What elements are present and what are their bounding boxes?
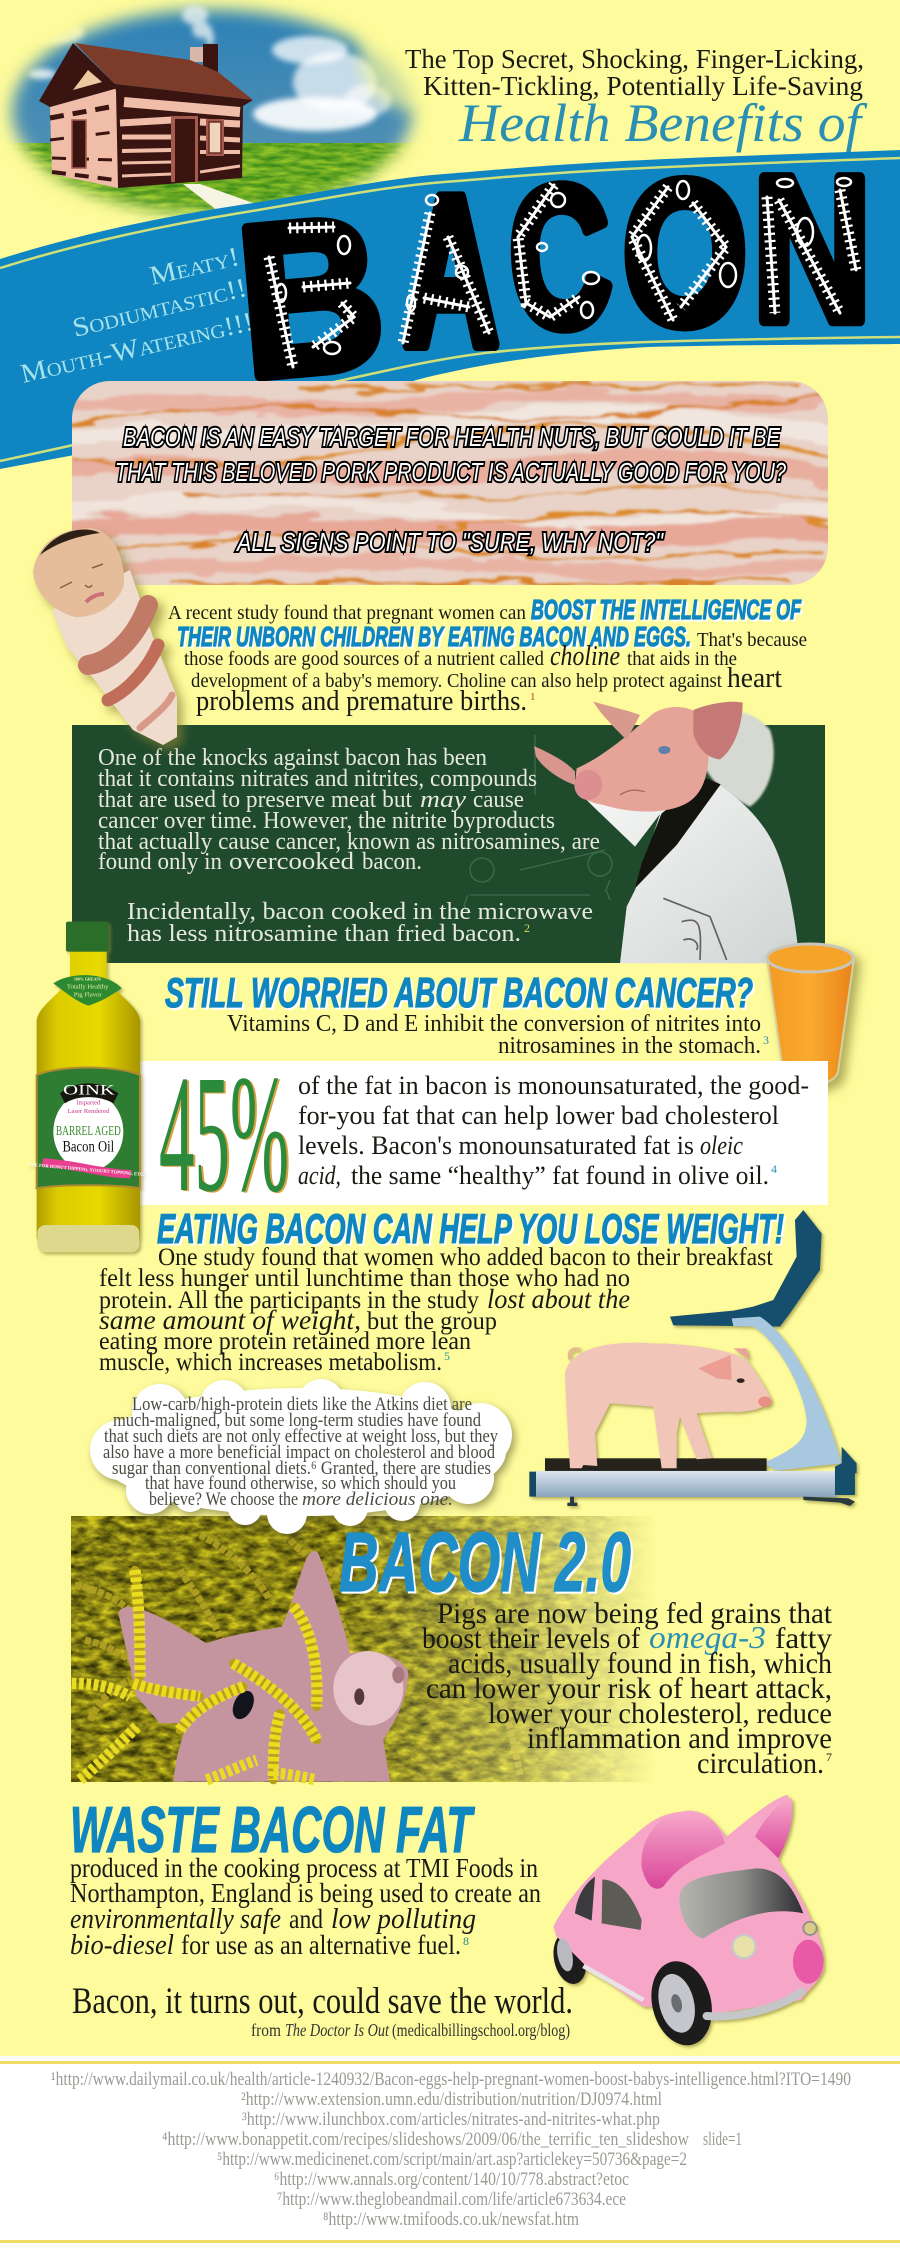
panel: 45 percent xyxy=(140,1041,828,1227)
cabin door xyxy=(171,116,198,182)
text block: bio-diesel xyxy=(70,1853,541,1961)
footnote list: ⁵http://www.medicinenet.com/script/main/art.asp?articlekey=50736&page=2 xyxy=(217,2149,687,2170)
coat pocket and glasses xyxy=(663,898,727,960)
neck label: 100% GREASY xyxy=(74,976,102,981)
banner taglines: Sodiumtastic!! xyxy=(69,272,249,343)
heading: waste bacon fat: WASTE BACON FAT xyxy=(70,1793,475,1866)
credit line: The Doctor Is Out xyxy=(285,2020,390,2040)
sky and grass vignette xyxy=(0,0,424,221)
pig ear xyxy=(698,1355,732,1380)
pig eye xyxy=(737,1378,745,1383)
chalkboard copy: may xyxy=(420,787,466,813)
text block: bio-diesel: and xyxy=(289,1904,323,1934)
text block: weight study: felt less hunger until lunchtime than those who had no xyxy=(99,1265,630,1292)
banner taglines xyxy=(18,241,256,389)
running board xyxy=(583,1966,643,2000)
panel: 45 percent: 45% xyxy=(159,1041,289,1227)
banner taglines: Mouth-Watering!!! xyxy=(18,306,256,389)
text block: weight study: lost about the xyxy=(487,1284,630,1314)
text block: vitamins xyxy=(227,1011,769,1059)
credit line: (medicalbillingschool.org/blog) xyxy=(392,2020,570,2041)
nostrils xyxy=(354,1688,364,1705)
stat copy: oleic xyxy=(700,1131,743,1160)
chalkboard copy: that are used to preserve meat but xyxy=(98,787,412,813)
log highlights xyxy=(120,102,240,176)
pig head xyxy=(575,707,709,811)
heading: health benefits of: Health Benefits of xyxy=(458,93,868,153)
text block: intelligence study: choline xyxy=(550,641,620,672)
text block: intelligence study: That's because xyxy=(697,629,807,651)
hand with chalk xyxy=(534,746,575,785)
text block: intelligence study: 1 xyxy=(530,691,536,703)
text block: omega-3 xyxy=(422,1597,833,1780)
OINK arc xyxy=(60,1083,118,1103)
chalkboard copy: has less nitrosamine than fried bacon. xyxy=(127,921,521,947)
headlight xyxy=(732,1935,756,1958)
stat copy: the same “healthy” fat found in olive oil. xyxy=(351,1161,769,1190)
deck rail xyxy=(535,1471,837,1497)
brand name: OINK xyxy=(63,1082,115,1098)
illustration: baby wrapped in bacon xyxy=(33,528,177,745)
stat copy: levels. Bacon's monounsaturated fat is xyxy=(298,1131,694,1160)
text block: omega-3: boost their levels of xyxy=(422,1622,640,1655)
neck label: Pig Flavor xyxy=(74,991,102,998)
text block: weight study: One study found that women who added bacon to their breakfast xyxy=(158,1244,773,1271)
white garden path xyxy=(183,184,256,211)
wild white hair xyxy=(703,712,774,807)
cabin window xyxy=(206,119,224,156)
treadmill upright xyxy=(732,1317,842,1471)
white panel xyxy=(140,1061,828,1205)
text block: omega-3: 7 xyxy=(826,1750,832,1764)
text block: intelligence study xyxy=(168,594,807,717)
credit line xyxy=(251,2020,570,2041)
neck label xyxy=(53,975,122,1006)
text block: omega-3: lower your cholesterol, reduce xyxy=(488,1697,832,1730)
gable xyxy=(39,43,118,107)
left wall xyxy=(50,88,118,188)
gable light patch xyxy=(73,70,102,90)
cloud copy: that have found otherwise, so which should you xyxy=(145,1473,456,1494)
label text: Laser Rendered xyxy=(67,1108,110,1115)
main label xyxy=(37,1067,140,1188)
chimney smoke xyxy=(182,5,214,46)
label text: Bacon Oil xyxy=(62,1139,115,1156)
chalkboard copy xyxy=(98,745,600,947)
intro copy xyxy=(115,422,786,557)
letter B: B xyxy=(230,172,392,422)
cloud shape xyxy=(90,1379,512,1534)
roof xyxy=(75,43,253,100)
far ear xyxy=(755,1798,793,1858)
pig snout xyxy=(333,1651,403,1726)
footnote list: ⁷http://www.theglobeandmail.com/life/article673634.ece xyxy=(277,2189,626,2210)
closing line: Bacon, it turns out, could save the world. xyxy=(72,1981,573,2022)
pale oil at base xyxy=(37,1225,139,1252)
car body xyxy=(553,1795,824,2015)
intro copy: ALL SIGNS POINT TO "SURE, WHY NOT?" xyxy=(235,527,664,557)
illustration: pig car xyxy=(549,1795,824,2052)
bacon texture xyxy=(50,381,860,585)
pig body xyxy=(565,1343,772,1468)
baby face xyxy=(60,564,104,602)
text block: bio-diesel: environmentally safe xyxy=(70,1904,281,1935)
footer background xyxy=(0,2056,900,2256)
text block: bio-diesel: Northampton, England is being used to create an xyxy=(70,1878,541,1908)
pig tail xyxy=(569,1349,580,1359)
panel: bacon strip intro xyxy=(50,381,860,585)
neck label: Totally Healthy xyxy=(67,983,109,990)
treadmill console xyxy=(670,1210,822,1327)
heading: top secret subtitle: The Top Secret, Shocking, Finger-Licking, xyxy=(405,44,864,74)
bacon wrap xyxy=(52,570,177,745)
title: BACON letters xyxy=(230,134,871,422)
cloud copy: that such diets are not only effective at weight loss, but they xyxy=(104,1426,498,1447)
text block: bio-diesel: bio-diesel xyxy=(70,1930,174,1961)
wheat ears background xyxy=(75,1535,610,1775)
panel: bacon 2.0 wheat field xyxy=(71,1516,661,1782)
snout xyxy=(574,770,602,800)
car snout xyxy=(793,1940,824,1984)
chalkboard copy: bacon. xyxy=(362,849,422,875)
text block: intelligence study: that aids in the xyxy=(627,648,737,670)
chimney xyxy=(190,47,203,62)
text block: omega-3: acids, usually found in fish, which xyxy=(448,1647,832,1680)
chimney stack xyxy=(203,44,218,74)
wheat stalk highlights xyxy=(72,1570,317,1780)
pig left ear xyxy=(593,702,640,740)
windshield xyxy=(679,1868,803,1938)
side window xyxy=(575,1877,595,1921)
far nostril xyxy=(392,1667,404,1683)
chalkboard copy: overcooked xyxy=(229,849,354,875)
bottle body xyxy=(37,952,140,1252)
white oval xyxy=(53,1092,123,1171)
near ear xyxy=(642,1811,725,1889)
text block: intelligence study: A recent study found that pregnant women can xyxy=(168,602,526,624)
panel: nitrates chalkboard xyxy=(72,702,825,963)
wheat photo xyxy=(71,1516,661,1782)
chrome bumper xyxy=(707,1992,802,2016)
pig snout xyxy=(758,1396,772,1407)
chalkboard copy: One of the knocks against bacon has been xyxy=(98,745,487,771)
pink ribbon: USE FOR DONUT DIPPING, YOGURT TOPPING, ETC. xyxy=(29,1163,145,1178)
text block: intelligence study: problems and premature births. xyxy=(196,686,527,717)
chalkboard xyxy=(72,725,825,963)
footnote list: ²http://www.extension.umn.edu/distribution/nutrition/DJ0974.html xyxy=(241,2089,662,2110)
text block: omega-3: circulation. xyxy=(697,1747,824,1780)
chalkboard copy: cancer over time. However, the nitrite byproducts xyxy=(98,808,555,834)
left wall dark patches xyxy=(50,106,115,180)
bacon streaks xyxy=(88,605,172,728)
cloud copy: Low-carb/high-protein diets like the Atkins diet are xyxy=(132,1394,472,1415)
letter C: C xyxy=(504,143,616,371)
cloud copy: believe? We choose the xyxy=(149,1489,298,1510)
door opening xyxy=(175,119,195,182)
pig eye xyxy=(229,1687,258,1723)
far headlight xyxy=(803,1922,817,1935)
footnote list: ⁴http://www.bonappetit.com/recipes/slideshows/2009/06/the_terrific_ten_slideshow xyxy=(162,2129,689,2150)
text block: vitamins: Vitamins C, D and E inhibit the conversion of nitrites into xyxy=(227,1011,761,1037)
illustration: pig on treadmill xyxy=(529,1210,857,1506)
side window xyxy=(72,120,86,168)
footer top rule xyxy=(0,2061,900,2064)
door window xyxy=(602,1879,642,1930)
pig head xyxy=(118,1551,408,1782)
wheat stalks base xyxy=(133,1570,317,1780)
footnote list: ³http://www.ilunchbox.com/articles/nitrates-and-nitrites-what.php xyxy=(242,2109,660,2130)
belt xyxy=(545,1458,767,1471)
text block: bacon 2.0 heading: BACON 2.0 xyxy=(339,1515,631,1609)
text block: weight study: eating more protein retained more lean xyxy=(99,1328,471,1355)
bottle cap xyxy=(66,922,109,952)
pig mouth xyxy=(620,790,645,795)
stat copy: of the fat in bacon is monounsaturated, the good- xyxy=(298,1071,809,1100)
text block: weight study: protein. All the participants in the study xyxy=(99,1287,479,1314)
feet xyxy=(567,1497,855,1506)
text block: vitamins: nitrosamines in the stomach. xyxy=(498,1033,761,1059)
text block: intelligence study: heart xyxy=(727,663,782,694)
text block: bio-diesel: low polluting xyxy=(331,1904,476,1935)
text block: weight study: 5 xyxy=(444,1349,450,1363)
text block: weight study: same amount of weight, xyxy=(99,1305,361,1335)
cloud copy: more delicious one. xyxy=(302,1489,453,1510)
pig right ear xyxy=(693,702,743,759)
stat copy: for-you fat that can help lower bad cholesterol xyxy=(298,1101,779,1130)
text block: intelligence study: those foods are good sources of a nutrient called xyxy=(184,648,544,670)
footnote list: ⁸http://www.tmifoods.co.uk/newsfat.htm xyxy=(323,2209,579,2230)
heading: top secret subtitle xyxy=(405,44,864,101)
motor cover xyxy=(835,1447,857,1495)
heading: top secret subtitle: Kitten-Tickling, Potentially Life-Saving xyxy=(423,71,863,101)
text block: bio-diesel: 8 xyxy=(463,1934,469,1948)
black turtleneck xyxy=(635,778,721,888)
stat copy xyxy=(298,1071,809,1190)
cloud copy: much-maligned, but some long-term studies have found xyxy=(113,1410,481,1431)
cloud copy xyxy=(103,1394,498,1510)
footer bottom rule xyxy=(0,2240,900,2243)
window panes xyxy=(209,122,221,153)
illustration: pig scientist xyxy=(534,702,799,963)
cloud copy: sugar than conventional diets.⁶ Granted, there are studies xyxy=(112,1458,491,1479)
text block: vitamins: 3 xyxy=(763,1033,769,1047)
letter A: A xyxy=(403,153,499,390)
illustration: log cabin scene xyxy=(0,0,424,221)
chalkboard copy: Incidentally, bacon cooked in the microwave xyxy=(127,899,593,925)
text block: bio-diesel: produced in the cooking process at TMI Foods in xyxy=(70,1853,538,1883)
credit line: from xyxy=(251,2020,281,2040)
panel: footnotes xyxy=(0,2056,900,2256)
label text xyxy=(56,1099,121,1156)
banner: blue ribbon xyxy=(0,150,900,469)
deck left cap xyxy=(529,1472,536,1497)
chalk formulas xyxy=(464,735,612,915)
text block: omega-3: inflammation and improve xyxy=(527,1722,832,1755)
chalkboard copy: that it contains nitrates and nitrites, compounds xyxy=(98,766,537,792)
illustration: pig in wheat xyxy=(72,1551,408,1782)
text block: omega-3: omega-3 xyxy=(649,1619,766,1655)
letter O: O xyxy=(623,139,747,367)
chalkboard copy: that actually cause cancer, known as nitrosamines, are xyxy=(98,829,600,855)
text block: intelligence study: development of a baby's memory. Choline can also help protect against xyxy=(191,670,722,692)
footnote list: slide=1 xyxy=(703,2129,742,2150)
text block: weight study: but the group xyxy=(367,1308,497,1335)
text block: omega-3: Pigs are now being fed grains that xyxy=(437,1597,833,1630)
label text: BARREL AGED xyxy=(56,1124,121,1139)
eaves shadow xyxy=(115,84,253,106)
text block: omega-3: fatty xyxy=(775,1622,832,1655)
rear hub xyxy=(554,1937,576,1973)
text block: bio-diesel: for use as an alternative fuel. xyxy=(181,1930,461,1960)
text block: weight study xyxy=(99,1244,773,1376)
stat copy: acid, xyxy=(298,1161,341,1190)
baby head xyxy=(33,528,124,617)
front wheel xyxy=(643,1955,720,2052)
footnote list xyxy=(51,2069,851,2230)
chalkboard copy: found only in xyxy=(98,849,222,875)
baby hair xyxy=(40,529,100,555)
cloud copy: also have a more beneficial impact on cholesterol and blood xyxy=(103,1442,495,1463)
letter N: N xyxy=(753,134,871,364)
text block: weight study: muscle, which increases metabolism. xyxy=(99,1349,442,1376)
chalkboard copy: 2 xyxy=(524,921,530,935)
right wall xyxy=(116,90,243,188)
label text: Imparted xyxy=(76,1099,101,1106)
rear wheel xyxy=(549,1930,591,1987)
lab coat xyxy=(587,785,799,963)
callout: atkins cloud xyxy=(90,1379,512,1534)
footnote list: ⁶http://www.annals.org/content/140/10/778.abstract?etoc xyxy=(274,2169,629,2190)
pig eye xyxy=(658,746,670,754)
stat copy: 4 xyxy=(771,1162,777,1176)
chalkboard copy: cause xyxy=(473,787,524,813)
far ear xyxy=(733,1348,750,1360)
text block: omega-3: can lower your risk of heart attack, xyxy=(426,1672,832,1705)
banner taglines: Meaty! xyxy=(147,241,242,291)
icon: orange juice glass xyxy=(767,944,854,1086)
illustration: bacon oil bottle xyxy=(29,922,145,1252)
